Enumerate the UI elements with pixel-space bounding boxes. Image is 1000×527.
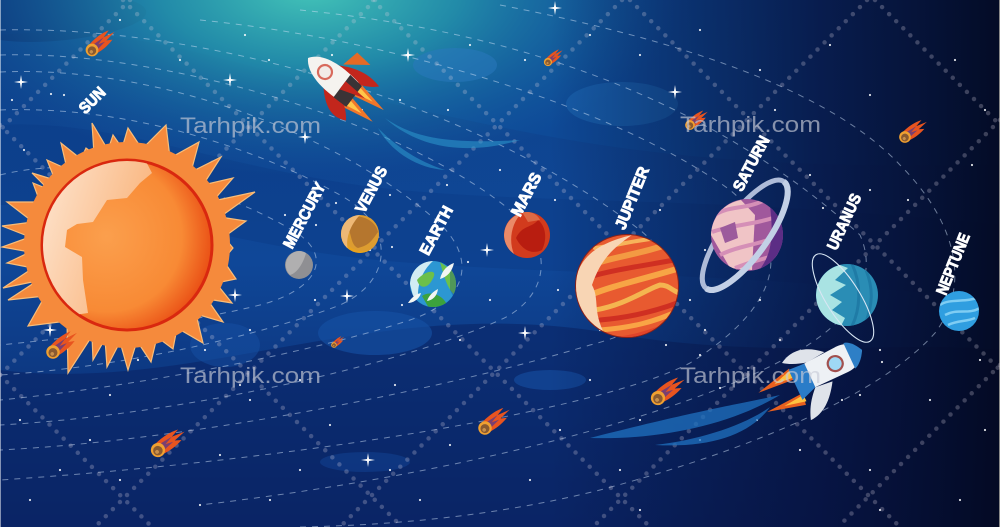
sun disc (42, 160, 212, 330)
label: sun: SUN (76, 84, 109, 117)
label: saturn: SATURN (730, 133, 774, 194)
lower rocket trail (590, 395, 780, 445)
body (299, 48, 360, 103)
saturn front ring (706, 182, 788, 290)
label: uranus: URANUS (825, 191, 865, 253)
label: jupiter: JUPITER (613, 164, 653, 232)
planet labels (76, 84, 974, 298)
label: earth: EARTH (417, 203, 457, 258)
sun corona spikes (2, 123, 255, 373)
rocket: upper left (290, 31, 402, 137)
sun corona ring (24, 142, 230, 348)
label: neptune: NEPTUNE (934, 231, 974, 298)
fins (780, 341, 848, 421)
upper rocket trail (378, 118, 520, 170)
saturn back ring (688, 169, 802, 301)
watermarks: Tarhpik.com (680, 112, 821, 137)
planet: saturn (700, 178, 791, 293)
sun (2, 123, 255, 373)
uranus ring (802, 246, 884, 350)
body (800, 337, 868, 389)
sun highlight (43, 161, 152, 314)
planet: neptune (939, 291, 980, 331)
label: mercury: MERCURY (281, 180, 330, 252)
flames (755, 368, 808, 421)
watermarks: Tarhpik.com (680, 363, 821, 388)
watermarks (180, 112, 821, 388)
label: mars: MARS (508, 170, 546, 220)
planet: mercury (285, 251, 313, 279)
rocket: lower right (749, 326, 880, 435)
planet: uranus (812, 253, 878, 343)
planet: mars (504, 212, 550, 258)
comets (43, 26, 930, 460)
flames (343, 84, 388, 128)
fins (312, 57, 380, 126)
planet: earth (408, 261, 456, 307)
watermarks: Tarhpik.com (180, 113, 321, 138)
planet: venus (341, 215, 379, 253)
planet: jupiter (574, 234, 685, 340)
watermarks: Tarhpik.com (180, 363, 321, 388)
label: venus: VENUS (353, 164, 391, 216)
